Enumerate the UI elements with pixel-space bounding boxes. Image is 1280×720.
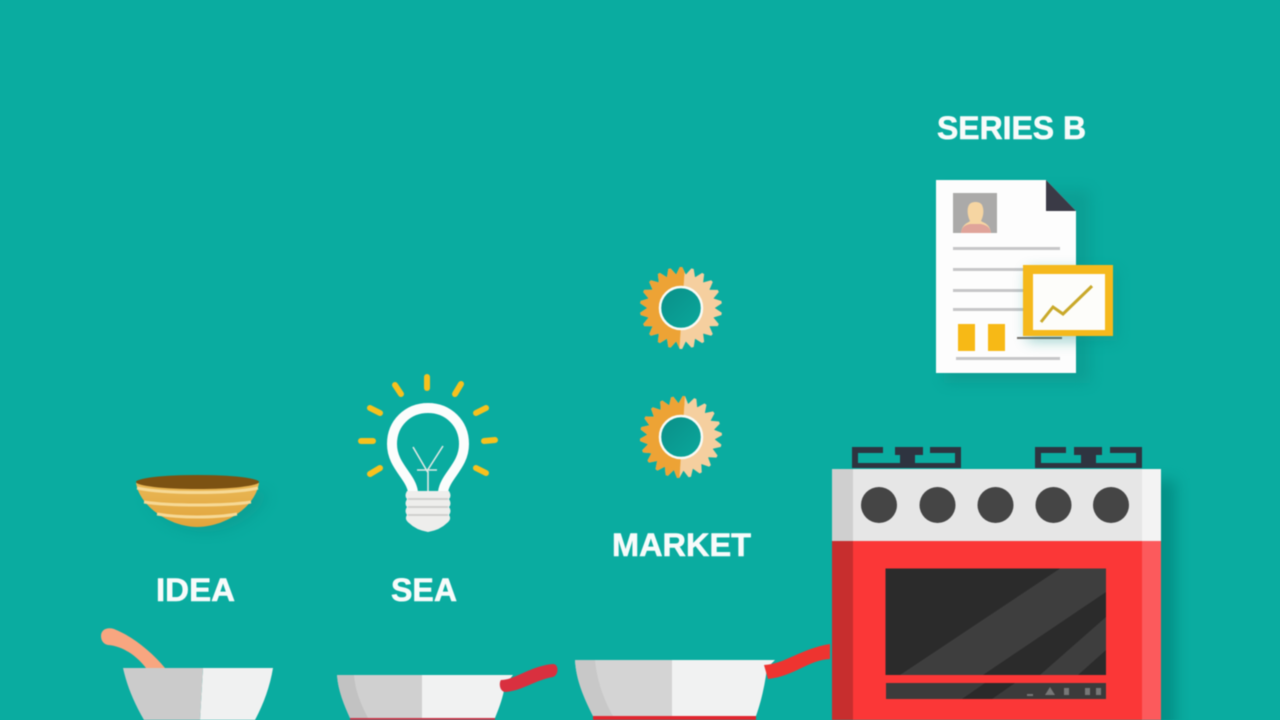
label: MARKET: MARKET [612,527,751,563]
pan handle [764,644,830,679]
bowl white side [200,668,273,720]
bowl grey side [123,668,203,720]
oven display bar [886,683,1106,699]
chart card [1023,265,1117,341]
label: IDEA: IDEA [156,572,235,608]
profile photo [953,193,997,233]
pan white side [422,675,513,718]
document page [936,180,1076,373]
oven window [886,568,1106,675]
document bars [958,324,1005,351]
bulb rays [361,377,495,474]
icon: top gear [640,267,722,349]
label: SEA: SEA [391,572,457,608]
icon: large pan [575,644,830,720]
spoon [101,628,165,668]
document text lines [953,247,1060,360]
bowl body [136,483,259,527]
bowl interior [136,475,259,489]
icon: investor document with chart [936,180,1117,383]
oven knobs [861,487,1129,523]
bulb glass [392,408,464,492]
icon: bottom gear [637,393,725,481]
right burner grate [1035,447,1142,468]
bowl stripes [137,488,258,517]
icon: mixing bowl with spoon [101,628,273,720]
oven body [832,541,1161,720]
pan burner [350,718,495,720]
icon: light bulb [361,377,495,532]
bulb base [406,491,450,532]
left burner grate [852,447,961,468]
pan grey side [575,660,672,716]
bulb filament [413,446,443,492]
document corner fold [1046,180,1076,211]
icon: small pan [337,664,558,720]
control panel [832,469,1161,541]
icon: wooden bowl [136,475,268,532]
pan burner [593,716,756,720]
pan handle [500,664,558,692]
pan grey side [337,675,422,718]
pan white side [672,660,775,716]
label: SERIES B: SERIES B [937,110,1086,146]
icon: oven [832,447,1176,720]
